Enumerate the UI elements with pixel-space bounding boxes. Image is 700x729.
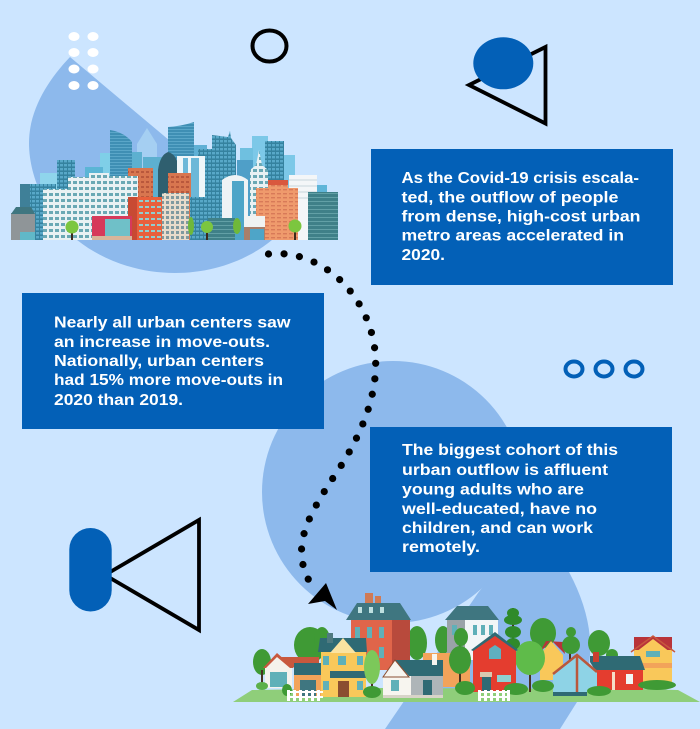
text box: urban centers move-outs: an increase in move-outs. — [54, 334, 270, 351]
houses illustration — [233, 593, 700, 702]
ground — [233, 688, 700, 702]
text box: Covid-19 outflow: ted, the outflow of people — [402, 190, 619, 206]
grey-white tall house — [445, 606, 499, 660]
white cottage left — [263, 653, 319, 688]
light green tree — [515, 641, 545, 692]
white dot grid — [68, 32, 98, 90]
dotted arrow from city to suburbs — [268, 254, 376, 610]
decorative blob: lower right — [385, 540, 590, 729]
three blue rings — [566, 362, 642, 376]
red barn house — [471, 632, 518, 692]
city skyline illustration — [11, 122, 338, 240]
text box: Covid-19 outflow — [371, 149, 673, 285]
text box: biggest cohort: The biggest cohort of this — [402, 442, 618, 459]
orange rear house — [423, 653, 470, 687]
text box: biggest cohort: children, and can work — [402, 520, 593, 537]
text box: biggest cohort: remotely. — [402, 539, 480, 556]
trees mid — [449, 608, 522, 690]
text box: urban centers move-outs: had 15% more move-outs in — [54, 372, 283, 389]
decorative blob: top left — [29, 57, 288, 273]
text box: urban centers move-outs: 2020 than 2019. — [54, 392, 183, 409]
text box: Covid-19 outflow: metro areas accelerated in — [402, 228, 624, 244]
text box: Covid-19 outflow: 2020. — [402, 247, 445, 264]
decorative blob: centre circle — [262, 361, 524, 623]
garage — [294, 663, 321, 697]
tree right mid — [562, 627, 580, 662]
text box: Covid-19 outflow: As the Covid-19 crisis escala- — [402, 170, 639, 187]
triangle and blue pill: lower left — [69, 520, 199, 630]
text box: urban centers move-outs: Nationally, urban centers — [54, 353, 264, 370]
text box: urban centers move-outs — [22, 293, 324, 429]
red teal-roofed house — [590, 652, 645, 690]
text box: biggest cohort: urban outflow is affluent — [402, 462, 609, 479]
text box: urban centers move-outs: Nearly all urban centers saw — [54, 314, 291, 332]
white and grey cottage — [383, 654, 443, 698]
glass house — [553, 654, 597, 696]
text box: biggest cohort: well-educated, have no — [401, 501, 597, 518]
text box: biggest cohort: young adults who are — [402, 482, 584, 498]
tall brick building — [346, 593, 411, 670]
yellow house — [318, 633, 367, 697]
text box: Covid-19 outflow: from dense, high-cost urban — [402, 208, 640, 226]
fences and bushes — [256, 680, 676, 701]
text box: biggest cohort — [370, 427, 672, 572]
yellow mid-right house — [538, 640, 565, 680]
triangle and blue circle: top right — [469, 37, 546, 123]
far right yellow house — [631, 636, 675, 684]
black ring — [252, 30, 286, 62]
light tree — [364, 650, 380, 693]
